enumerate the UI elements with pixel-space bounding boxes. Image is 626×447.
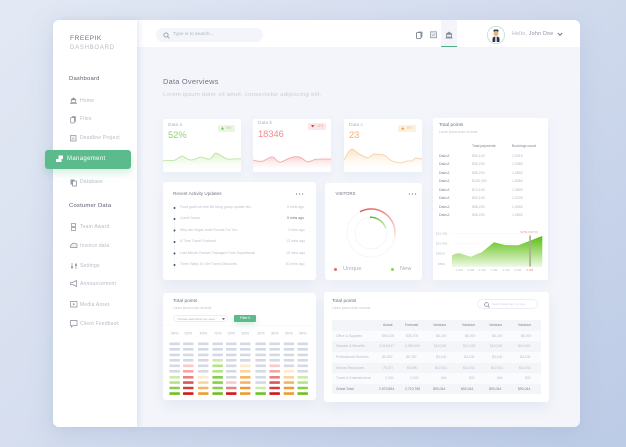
activity timeline: 15 mins ago bbox=[286, 251, 305, 255]
budget table: $10,015 bbox=[463, 344, 475, 348]
logo: FREEPIK bbox=[70, 34, 102, 42]
activity timeline: 12 mins ago bbox=[286, 239, 305, 243]
value: 23 bbox=[349, 130, 359, 140]
area chart: $15,000 bbox=[436, 232, 447, 236]
user name: Hello, John Doe bbox=[512, 31, 553, 37]
payments table: 1,0015 bbox=[512, 154, 523, 158]
budget table: 2,000 bbox=[410, 376, 418, 380]
budget table: $90,044 bbox=[461, 387, 473, 391]
area chart: 3 AM bbox=[478, 268, 486, 272]
budget table: $10,011 bbox=[491, 366, 503, 370]
panel: total points table: Lorem ipsum dolor sit amet bbox=[332, 306, 370, 310]
badge bbox=[218, 124, 235, 132]
payments table: $50,100 bbox=[472, 154, 485, 158]
payments table: 1,5800 bbox=[512, 188, 523, 192]
badge bbox=[308, 123, 326, 130]
area chart: $10,000 bbox=[436, 242, 447, 246]
area chart: 2 AM bbox=[514, 268, 522, 272]
payments table: 1,5802 bbox=[512, 170, 523, 174]
area chart: 2 AM bbox=[467, 268, 475, 272]
payments table: 1,0089 bbox=[512, 162, 523, 166]
nav: announcement: Announcement bbox=[80, 281, 116, 287]
panel: total points heatmap: Lorem ipsum dolor sit amet bbox=[173, 306, 211, 310]
payments table: Data A bbox=[439, 154, 450, 158]
budget table: $90,044 bbox=[433, 387, 445, 391]
heading: dashboard: Dashboard bbox=[69, 76, 100, 82]
heatmap bbox=[169, 332, 308, 395]
budget table: Variance bbox=[489, 323, 502, 327]
nav: settings: Settings bbox=[80, 262, 100, 268]
heatmap: 50% bbox=[184, 332, 193, 336]
budget table: $10,015 bbox=[518, 344, 530, 348]
legend: new: New bbox=[400, 266, 412, 272]
budget table: $3,100 bbox=[492, 355, 502, 359]
nav: files: Files bbox=[80, 116, 92, 122]
budget table: Travel & Entertainment bbox=[336, 376, 371, 380]
budget table: 600 bbox=[469, 376, 475, 380]
table search bbox=[477, 299, 538, 308]
activity timeline: Come Dance bbox=[180, 216, 200, 220]
budget table: $2,600 bbox=[382, 355, 392, 359]
panel heading: Total points bbox=[173, 299, 197, 304]
activity timeline: 9 mins ago bbox=[287, 216, 304, 220]
panel: total points payments: Lorem ipsum dolor sit amet bbox=[439, 130, 477, 134]
budget table: 600 bbox=[497, 376, 503, 380]
area chart bbox=[436, 230, 542, 272]
nav: deadline project: Deadline Project bbox=[80, 135, 120, 141]
budget table: Variance bbox=[518, 323, 531, 327]
budget table: 600 bbox=[441, 376, 447, 380]
sparkline bbox=[253, 156, 331, 166]
badge: -6% bbox=[317, 124, 323, 128]
dropdown bbox=[173, 314, 228, 322]
payments table: $74,100 bbox=[472, 188, 485, 192]
more menu bbox=[408, 193, 416, 195]
panel heading: Recent Activity Updates bbox=[173, 190, 222, 196]
icon: files bbox=[416, 32, 422, 39]
panel heading: VISITORS bbox=[336, 191, 355, 196]
value: 18346 bbox=[258, 128, 284, 138]
nav: home bbox=[70, 98, 94, 104]
budget table: $3,100 bbox=[520, 355, 530, 359]
heatmap: 30% bbox=[271, 332, 279, 336]
budget table: $10,011 bbox=[463, 366, 475, 370]
payments table bbox=[439, 144, 536, 217]
budget table bbox=[332, 320, 541, 394]
heatmap: 40% bbox=[299, 332, 307, 336]
area chart: $500 bbox=[438, 262, 445, 266]
badge bbox=[398, 125, 416, 132]
payments table: $35,200 bbox=[472, 162, 485, 166]
activity timeline bbox=[174, 204, 305, 272]
avatar bbox=[487, 26, 505, 44]
panel: total points table bbox=[324, 292, 549, 402]
table search: Search data here for you bbox=[492, 302, 525, 306]
panel heading: Total points bbox=[439, 123, 463, 128]
budget table: $5,200 bbox=[465, 334, 475, 338]
area chart: 1 AM bbox=[502, 268, 510, 272]
budget table: $3,100 bbox=[464, 355, 474, 359]
payments table: $58,200 bbox=[472, 204, 485, 208]
budget table: 2,519,617 bbox=[379, 344, 394, 348]
area chart: 3 AM bbox=[526, 268, 534, 272]
value: 52% bbox=[168, 130, 187, 140]
heatmap: 70% bbox=[214, 332, 222, 336]
panel: visitors bbox=[325, 183, 422, 280]
card: data a: Data a bbox=[168, 123, 182, 128]
payments table: Data A bbox=[439, 213, 450, 217]
payments table: 1,0235 bbox=[512, 196, 523, 200]
badge: 5% bbox=[226, 126, 231, 130]
budget table: 75,077 bbox=[383, 366, 393, 370]
activity timeline: 7 mins ago bbox=[288, 228, 305, 232]
activity timeline: 5 mins ago bbox=[287, 205, 304, 209]
heatmap: 20% bbox=[257, 332, 265, 336]
logo: DASHBOARD bbox=[70, 44, 115, 50]
payments table: Data A bbox=[439, 162, 450, 166]
budget table: $5,590 bbox=[407, 366, 417, 370]
activity timeline: Food goal hot new life bring group update eth... bbox=[180, 205, 253, 209]
nav: invoice data: Invoice data bbox=[80, 243, 109, 249]
legend: unique: Unique bbox=[343, 266, 362, 272]
budget table: $5,780 bbox=[406, 355, 416, 359]
payments table: Bookings count bbox=[512, 144, 536, 148]
sidebar bbox=[53, 20, 137, 427]
heatmap: 40% bbox=[171, 332, 179, 336]
budget table: Grand Total bbox=[336, 387, 353, 391]
budget table: $5,200 bbox=[492, 334, 502, 338]
button bbox=[234, 314, 256, 322]
activity timeline: Last Minute Festive Packages From Superbreak bbox=[180, 251, 255, 255]
budget table: 600 bbox=[525, 376, 531, 380]
card: data a bbox=[163, 119, 241, 172]
active tab: team bbox=[441, 20, 457, 47]
budget table: $50,100 bbox=[382, 334, 394, 338]
budget table: Professional Services bbox=[336, 355, 369, 359]
heatmap: 50% bbox=[241, 332, 250, 336]
payments table: $92,100 bbox=[472, 196, 485, 200]
nav: files bbox=[70, 116, 92, 124]
payments table: 1,8064 bbox=[512, 179, 523, 183]
area chart: $5000 bbox=[436, 252, 445, 256]
payments table: Data A bbox=[439, 170, 450, 174]
nav: client feedback: Client Feedback bbox=[80, 321, 119, 327]
donut chart bbox=[346, 208, 396, 258]
search box bbox=[156, 28, 263, 42]
budget table: Actual bbox=[383, 323, 392, 327]
panel: recent activity bbox=[163, 182, 316, 280]
nav: client feedback bbox=[70, 320, 119, 328]
budget table: $90,044 bbox=[489, 387, 501, 391]
budget table: $3,100 bbox=[436, 355, 446, 359]
budget table: 2,200 bbox=[385, 376, 394, 380]
card: data b: Data b bbox=[258, 121, 272, 126]
nav: team award bbox=[71, 223, 109, 231]
more menu bbox=[296, 193, 304, 195]
badge: 6% bbox=[407, 126, 412, 130]
budget table: $90,044 bbox=[518, 387, 530, 391]
panel: total points heatmap bbox=[163, 293, 316, 400]
nav: database: Database bbox=[80, 179, 103, 185]
card: data b bbox=[253, 119, 331, 172]
icon: calendar bbox=[430, 31, 437, 38]
dashboard window bbox=[53, 20, 580, 427]
payments table: $105,200 bbox=[472, 179, 487, 183]
nav: management active bbox=[45, 150, 131, 168]
search box: Type in to search... bbox=[173, 32, 214, 36]
budget table: $10,011 bbox=[519, 366, 531, 370]
nav: invoice data bbox=[70, 242, 110, 249]
card: data c bbox=[344, 119, 422, 172]
activity timeline: Why are Vegas hotel Rooms For You bbox=[180, 228, 237, 232]
nav: announcement bbox=[70, 280, 116, 287]
budget table: Salaries & Benefits bbox=[336, 344, 365, 348]
area chart: 1 AM bbox=[455, 268, 463, 272]
area chart: $250,003.50 bbox=[520, 230, 538, 234]
nav: media asset: Media Asset bbox=[80, 302, 109, 308]
sparkline bbox=[163, 152, 241, 164]
panel heading: Total points bbox=[332, 298, 356, 304]
budget table: 2,050,000 bbox=[405, 344, 420, 348]
budget table: Human Resources bbox=[336, 366, 364, 370]
budget table: $10,015 bbox=[490, 344, 502, 348]
payments table: Data A bbox=[439, 188, 450, 192]
heatmap: 40% bbox=[199, 332, 208, 336]
area chart: 4 AM bbox=[490, 268, 498, 272]
budget table: $5,200 bbox=[521, 334, 531, 338]
card: data c: Data c bbox=[349, 123, 363, 128]
sparkline bbox=[344, 148, 422, 164]
heading: customer data: Costumer Data bbox=[69, 203, 111, 209]
budget table: $5,200 bbox=[436, 334, 446, 338]
payments table: $38,200 bbox=[472, 170, 485, 174]
dropdown: Choose data what you need bbox=[178, 316, 215, 320]
payments table: Data A bbox=[439, 204, 450, 208]
page heading: Data Overviews bbox=[163, 76, 219, 86]
heatmap: 20% bbox=[227, 332, 236, 336]
payments table: Total payments bbox=[472, 144, 496, 148]
activity timeline: 30 mins ago bbox=[286, 262, 305, 266]
payments table: 1,5802 bbox=[512, 213, 523, 217]
payments table: Data A bbox=[439, 196, 450, 200]
nav: management active: Management bbox=[67, 156, 106, 162]
top bar bbox=[137, 20, 580, 47]
logo bbox=[70, 34, 115, 50]
payments table: Data A bbox=[439, 179, 450, 183]
budget table: Office & Supplies bbox=[336, 334, 362, 338]
nav: media asset bbox=[70, 301, 110, 308]
panel: total points payments bbox=[433, 118, 548, 280]
button: Filter it bbox=[240, 316, 250, 320]
budget table: 2,710,785 bbox=[405, 387, 420, 391]
budget table: 2,570,854 bbox=[379, 387, 394, 391]
budget table: Variance bbox=[462, 323, 475, 327]
nav: database bbox=[70, 179, 103, 186]
icon: chevron bbox=[558, 32, 562, 36]
activity timeline: A Time Travel Postcard bbox=[180, 239, 216, 243]
payments table: $38,200 bbox=[472, 213, 485, 217]
budget table: $35,700 bbox=[406, 334, 418, 338]
nav: home: Home bbox=[80, 98, 94, 104]
nav: team award: Team Award bbox=[80, 224, 109, 230]
payments table: 1,0050 bbox=[512, 204, 523, 208]
page subtitle: Lorem ipsum dolor sit amet, consectetur adipiscing elit. bbox=[163, 92, 322, 98]
budget table: Variance bbox=[433, 323, 446, 327]
activity timeline: Three Ways To Get Travel Discounts bbox=[180, 262, 237, 266]
budget table: $10,015 bbox=[434, 344, 446, 348]
nav: settings bbox=[71, 262, 100, 269]
budget table: $10,011 bbox=[435, 366, 447, 370]
heatmap: 50% bbox=[285, 332, 293, 336]
budget table: Forecast bbox=[405, 323, 418, 327]
